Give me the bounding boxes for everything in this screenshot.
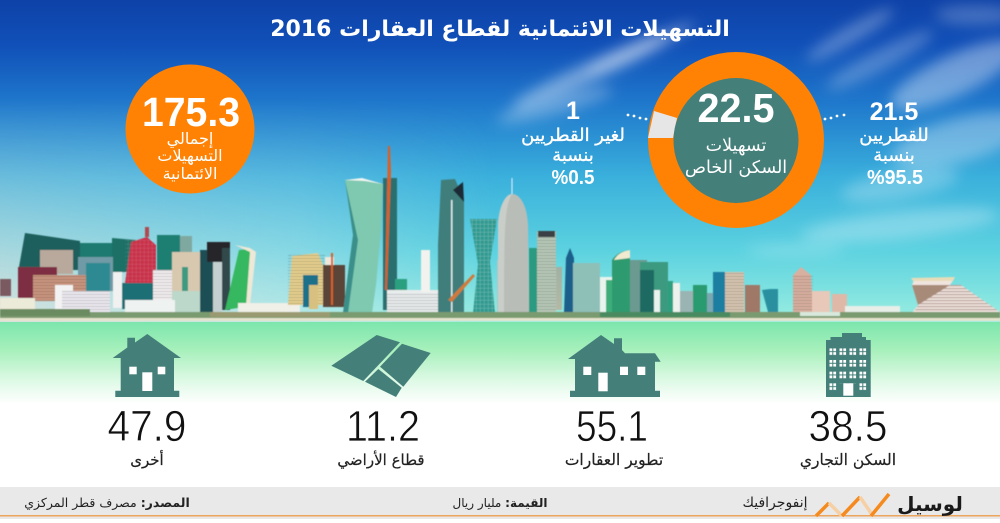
label: أخرى <box>130 450 164 469</box>
infographic tag: إنفوجرافيك <box>742 495 808 511</box>
Qatari percent: %95.5 <box>867 167 923 189</box>
title: التسهيلات الائتمانية لقطاع العقارات 2016 <box>270 17 730 42</box>
Qatari label: للقطريين <box>859 125 929 146</box>
value: 38.5 <box>808 402 888 451</box>
background: water fading to white <box>0 322 1000 404</box>
logo mark <box>816 494 889 516</box>
donut label: تسهيلات <box>706 136 767 156</box>
dotted leader right <box>824 114 845 120</box>
middle cluster <box>288 146 500 313</box>
Qatari label: بنسبة <box>873 145 915 166</box>
callout: total credit facilities <box>126 64 254 194</box>
Burj Doha tower <box>498 178 529 314</box>
non-Qatari label: بنسبة <box>552 145 594 166</box>
value: 55.1 <box>576 402 648 451</box>
Qatari value: 21.5 <box>870 98 918 126</box>
icon: land plots <box>331 335 431 397</box>
non-Qatari value: 1 <box>566 97 580 125</box>
stat: other <box>108 334 186 469</box>
total value: 175.3 <box>142 89 240 135</box>
non-Qatari label: لغير القطريين <box>521 125 625 146</box>
logo wordmark: لوسيل <box>897 492 963 516</box>
unit: القيمة: مليار ريال <box>453 496 547 511</box>
left cluster <box>0 227 300 314</box>
background: sky <box>0 0 1000 322</box>
callout: Qatari <box>859 98 929 189</box>
stat: land sector <box>331 335 431 470</box>
donut value: 22.5 <box>698 85 774 131</box>
label: تطوير العقارات <box>565 451 663 469</box>
label: السكن التجاري <box>800 451 896 470</box>
stat: real estate development <box>565 335 663 469</box>
donut label: السكن الخاص <box>685 158 787 178</box>
callout: non-Qatari <box>521 97 625 189</box>
value: 47.9 <box>108 402 186 451</box>
icon: office building <box>826 333 871 397</box>
total label: التسهيلات <box>157 146 223 166</box>
total label: إجمالي <box>167 129 213 149</box>
non-Qatari share wedge <box>648 111 677 138</box>
footer bar <box>0 487 1000 519</box>
shoreline trees <box>0 309 1000 321</box>
right cluster <box>529 231 900 320</box>
value: 11.2 <box>346 402 420 451</box>
source: المصدر: مصرف قطر المركزي <box>24 495 190 511</box>
Sheraton pyramid hotel <box>908 277 1000 318</box>
donut chart: private housing <box>648 52 824 228</box>
skyline photo <box>0 146 1000 321</box>
label: قطاع الأراضي <box>337 450 425 470</box>
dotted leader left <box>627 114 647 120</box>
total label: الائتمانية <box>163 164 217 183</box>
stat: commercial housing <box>800 333 896 470</box>
icon: house <box>113 334 181 397</box>
non-Qatari percent: %0.5 <box>552 167 594 189</box>
icon: large house <box>568 335 661 397</box>
